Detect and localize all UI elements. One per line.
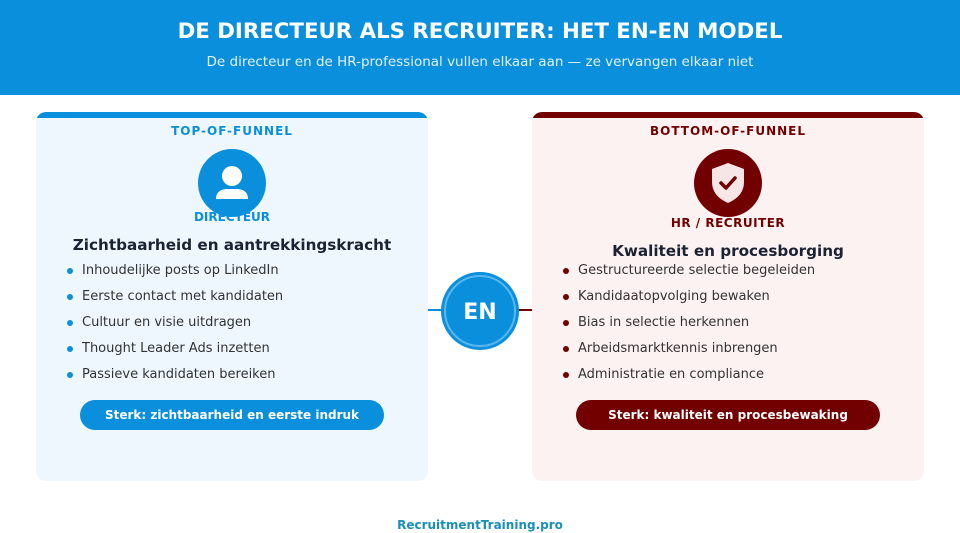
panel: directeur: Inhoudelijke posts op LinkedIn: [82, 263, 279, 278]
panel: directeur: Passieve kandidaten bereiken: [82, 367, 275, 382]
button: Sterk: zichtbaarheid en eerste indruk: [105, 408, 359, 422]
panel: hr: [532, 112, 924, 481]
button: Sterk: kwaliteit en procesbewaking: [608, 408, 848, 422]
subtitle: De directeur en de HR-professional vullen elkaar aan — ze vervangen elkaar niet: [207, 54, 753, 70]
panel: directeur: Eerste contact met kandidaten: [82, 289, 283, 304]
icon: person: [198, 149, 266, 217]
panel: directeur: [36, 112, 428, 481]
label: bottom-of-funnel: BOTTOM-OF-FUNNEL: [650, 124, 806, 138]
title: DE DIRECTEUR ALS RECRUITER: HET EN-EN MODEL: [178, 19, 782, 44]
header: [0, 0, 960, 95]
footer: RecruitmentTraining.pro: [397, 518, 563, 532]
role: hr: HR / RECRUITER: [671, 216, 785, 230]
panel: hr: Bias in selectie herkennen: [578, 315, 749, 330]
panel: directeur: Thought Leader Ads inzetten: [82, 341, 270, 356]
icon: shield: [694, 149, 762, 217]
connector lines: [428, 309, 444, 311]
button: [576, 400, 880, 430]
heading: Kwaliteit en procesborging: [612, 242, 844, 260]
panel: hr: Arbeidsmarktkennis inbrengen: [578, 341, 778, 356]
EN circle: EN: [463, 300, 497, 325]
button: [80, 400, 384, 430]
panel: hr: Kandidaatopvolging bewaken: [578, 289, 770, 304]
role: directeur: DIRECTEUR: [194, 210, 270, 224]
panel: hr: Gestructureerde selectie begeleiden: [578, 263, 815, 278]
EN circle: [441, 272, 519, 350]
heading: Zichtbaarheid en aantrekkingskracht: [73, 236, 391, 254]
panel: directeur: Cultuur en visie uitdragen: [82, 315, 251, 330]
bullet list: [67, 263, 283, 382]
bullet list: [563, 263, 815, 382]
panel: hr: Administratie en compliance: [578, 367, 764, 382]
label: top-of-funnel: TOP-OF-FUNNEL: [171, 124, 293, 138]
